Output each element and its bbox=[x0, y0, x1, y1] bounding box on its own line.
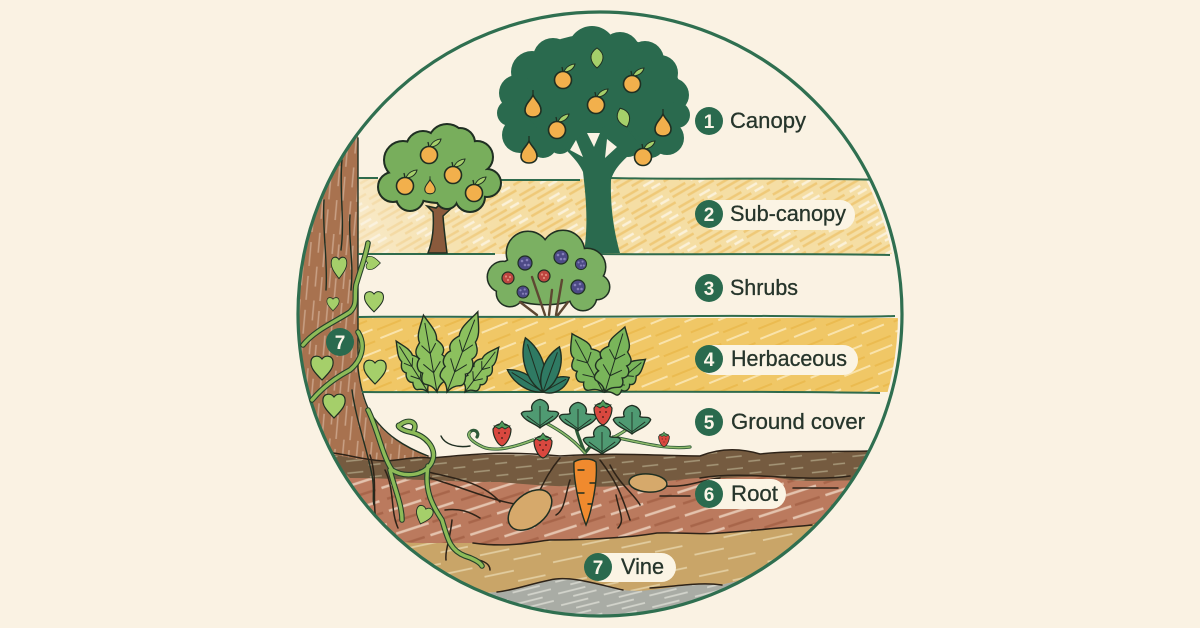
vine number badge: 7 bbox=[335, 333, 345, 354]
label 3 shrubs: Shrubs bbox=[730, 275, 798, 300]
canopy crown bbox=[497, 26, 690, 158]
label 5 ground cover: Ground cover bbox=[731, 409, 865, 434]
label 6 root bbox=[695, 479, 786, 509]
strawberry fruit bbox=[493, 400, 669, 458]
potato small bbox=[628, 473, 668, 493]
label 7 vine: 7 bbox=[593, 558, 603, 579]
circle interior layers bbox=[280, 120, 900, 628]
tree trunk at left bbox=[300, 136, 430, 460]
label 1 canopy: Canopy bbox=[730, 108, 806, 133]
climbing vine bbox=[303, 243, 482, 566]
label 2 sub-canopy: Sub-canopy bbox=[730, 201, 846, 226]
herbaceous plants bbox=[387, 306, 653, 402]
sandy subsoil layer bbox=[404, 524, 815, 593]
trunk bbox=[427, 203, 456, 253]
circular diagram bbox=[280, 12, 902, 628]
branch gaps bbox=[570, 133, 617, 158]
apples and pears bbox=[521, 48, 671, 166]
trifoliate leaves bbox=[521, 399, 651, 454]
sub-canopy tree bbox=[379, 125, 500, 253]
carrot and potatoes bbox=[501, 459, 668, 538]
runners bbox=[469, 418, 690, 453]
label 4 herbaceous: 4 bbox=[704, 350, 715, 371]
oak-leaf plant right bbox=[557, 322, 653, 402]
trunk bark lines bbox=[324, 138, 428, 505]
shrub fill bbox=[488, 231, 609, 310]
band fade at left bbox=[358, 179, 487, 253]
shrub outline bbox=[488, 231, 609, 310]
canopy trunk bbox=[562, 120, 640, 253]
layer labels bbox=[584, 107, 865, 582]
outer circle outline bbox=[298, 12, 902, 616]
vine number badge bbox=[326, 328, 354, 356]
crown fruit bbox=[396, 139, 486, 202]
vine strands outline bbox=[303, 243, 482, 566]
ground cover strawberries bbox=[441, 399, 690, 458]
band: sub-canopy bbox=[358, 179, 898, 254]
vine leaves bbox=[311, 256, 434, 527]
label 4 herbaceous: Herbaceous bbox=[731, 346, 847, 371]
label 6 root: 6 bbox=[704, 485, 714, 506]
oak-leaf plant left bbox=[387, 306, 507, 399]
soil roots bbox=[370, 455, 640, 570]
label 7 vine: Vine bbox=[621, 554, 664, 579]
label 5 ground cover: 5 bbox=[704, 413, 715, 434]
label 6 root: Root bbox=[731, 481, 778, 506]
shrub bbox=[488, 231, 609, 315]
vine strands fill bbox=[303, 243, 482, 566]
berries bbox=[502, 250, 587, 298]
shrub stems bbox=[520, 277, 568, 315]
label 1 canopy: 1 bbox=[704, 112, 715, 133]
thin tendril bbox=[441, 436, 470, 447]
band fills bbox=[358, 179, 898, 392]
topsoil layer bbox=[325, 450, 880, 487]
dark leaf plant bbox=[504, 335, 572, 398]
label 2 sub-canopy bbox=[695, 200, 855, 230]
runner highlight bbox=[469, 418, 690, 453]
band dividing lines bbox=[358, 178, 895, 393]
label 4 herbaceous bbox=[695, 345, 858, 375]
label 7 vine bbox=[584, 553, 676, 582]
canopy tree bbox=[497, 26, 690, 253]
crown fill bbox=[379, 125, 500, 211]
soil strata lines bbox=[333, 450, 868, 592]
grey bedrock bbox=[488, 579, 738, 614]
label 3 shrubs: 3 bbox=[704, 279, 714, 300]
carrot marks bbox=[578, 470, 595, 504]
red-brown root layer bbox=[344, 472, 850, 544]
potato large bbox=[501, 482, 559, 538]
band: herbaceous bbox=[358, 318, 898, 392]
label 1 canopy bbox=[695, 107, 806, 135]
label 3 shrubs bbox=[695, 274, 798, 302]
crown outline bbox=[379, 125, 500, 211]
label 2 sub-canopy: 2 bbox=[704, 205, 714, 226]
carrot bbox=[574, 459, 596, 525]
